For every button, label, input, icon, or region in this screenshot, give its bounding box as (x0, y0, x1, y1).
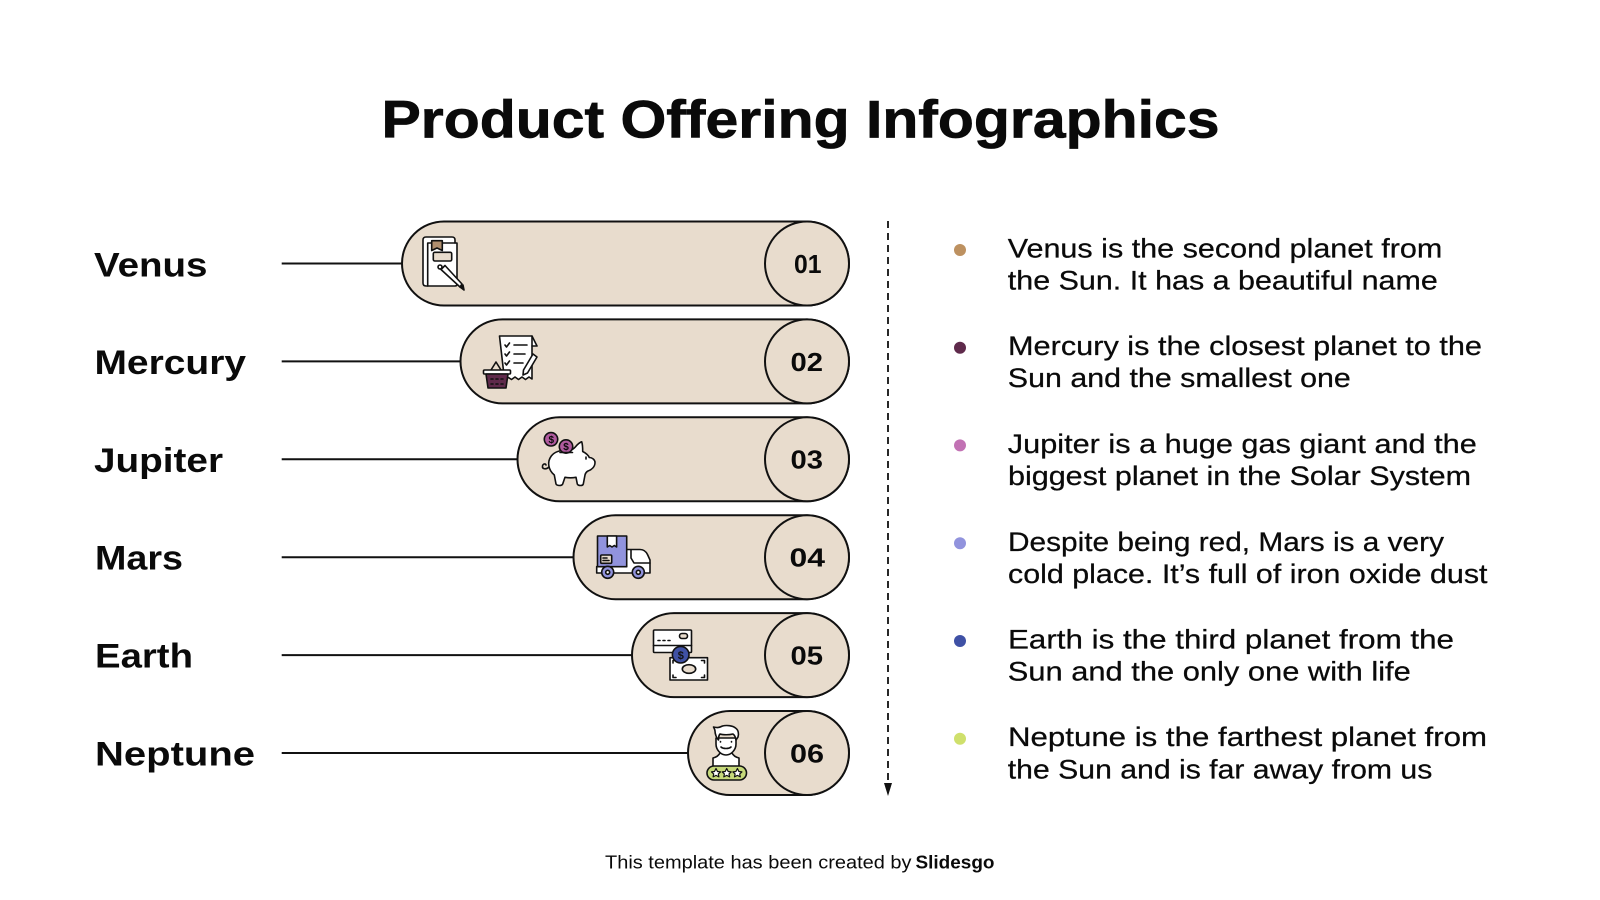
number: 03 (790, 445, 823, 475)
bullet (954, 342, 966, 354)
label: Mars: Mars (95, 540, 183, 578)
number: 06 (790, 738, 824, 768)
label: Earth: Earth (95, 638, 193, 676)
number circle (765, 417, 849, 501)
icon: delivery truck (597, 536, 650, 578)
pill (402, 222, 849, 306)
description: cold place. It’s full of iron oxide dust (1008, 559, 1488, 589)
connector line (282, 556, 574, 558)
connector line (282, 360, 460, 362)
connector line (282, 752, 688, 754)
label: Venus: Venus (94, 246, 208, 284)
description: Despite being red, Mars is a very (1008, 527, 1445, 557)
label: Neptune: Neptune (95, 735, 255, 773)
number: 04 (790, 543, 826, 573)
pill (518, 417, 849, 501)
title: Product Offering Infographics (382, 91, 1220, 150)
footer credit: Slidesgo (916, 851, 994, 872)
text block: Venus (954, 233, 1442, 295)
description: Mercury is the closest planet to the (1008, 331, 1482, 361)
number circle (765, 515, 849, 599)
description: Earth is the third planet from the (1008, 624, 1454, 654)
row 4: Mars (95, 515, 849, 599)
text block: Earth (954, 624, 1454, 686)
number: 01 (794, 249, 822, 279)
pill (688, 711, 849, 795)
text block: Mercury (954, 331, 1482, 393)
footer credit: This template has been created by (605, 851, 912, 872)
bullet (954, 439, 966, 451)
icon: checklist receipt and basket (484, 336, 537, 388)
row 3: Jupiter (94, 417, 849, 501)
text block: Mars (954, 527, 1488, 589)
dashed arrow divider (884, 221, 892, 796)
description: Venus is the second planet from (1008, 233, 1442, 263)
row 6: Neptune (95, 711, 849, 795)
icon: person with star rating (707, 726, 746, 780)
icon: card, coin and banknote (654, 630, 708, 680)
connector line (282, 654, 632, 656)
icon: piggy bank and coins (542, 433, 595, 486)
number circle (765, 613, 849, 697)
connector line (282, 458, 518, 460)
number circle (765, 222, 849, 306)
label: Jupiter: Jupiter (94, 442, 223, 480)
connector line (282, 262, 402, 264)
number circle (765, 319, 849, 403)
row 2: Mercury (94, 319, 849, 403)
number: 05 (790, 640, 823, 670)
bullet (954, 635, 966, 647)
row 1: Venus (94, 222, 849, 306)
pill (460, 319, 849, 403)
text block: Jupiter (954, 429, 1477, 491)
number: 02 (790, 347, 823, 377)
label: Mercury: Mercury (94, 344, 246, 382)
number circle (765, 711, 849, 795)
description: Sun and the smallest one (1008, 363, 1351, 393)
bullet (954, 537, 966, 549)
description: Jupiter is a huge gas giant and the (1008, 429, 1477, 459)
bullet (954, 733, 966, 745)
text block: Neptune (954, 722, 1487, 784)
description: Sun and the only one with life (1008, 656, 1411, 686)
description: biggest planet in the Solar System (1008, 461, 1471, 491)
icon: piggy bank and coins: $ (548, 435, 554, 446)
pill (574, 515, 849, 599)
icon: notebook and pen (423, 237, 464, 290)
bullet (954, 244, 966, 256)
icon: card, coin and banknote: $ (678, 650, 684, 662)
description: Neptune is the farthest planet from (1008, 722, 1487, 752)
description: the Sun and is far away from us (1008, 754, 1432, 784)
pill (632, 613, 849, 697)
description: the Sun. It has a beautiful name (1008, 265, 1438, 295)
row 5: Earth (95, 613, 849, 697)
icon: piggy bank and coins: $ (563, 442, 569, 453)
